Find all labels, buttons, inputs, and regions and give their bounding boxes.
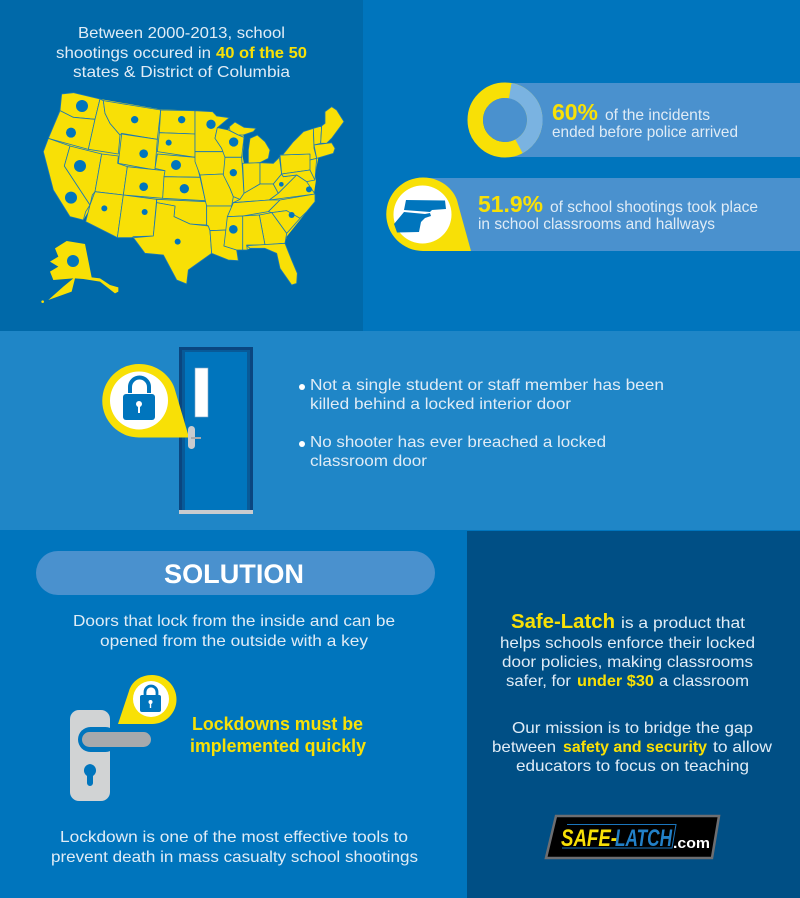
lockdown text — [51, 829, 418, 866]
product description: safer, for — [506, 673, 572, 690]
stat: 51.9 percent: in school classrooms and hallways — [478, 216, 715, 233]
product description: helps schools enforce their locked — [500, 635, 755, 652]
icon: door handle — [70, 710, 151, 801]
lockdown callout: implemented quickly — [190, 736, 366, 756]
icon: small padlock pin — [118, 675, 176, 724]
map heading — [56, 25, 307, 81]
solution heading — [36, 551, 435, 595]
icon: gun pin — [386, 178, 471, 251]
stat: 60 percent: 60% — [552, 99, 598, 125]
mission text — [492, 720, 772, 775]
solution text — [73, 613, 395, 650]
lockdown callout: Lockdowns must be — [192, 714, 363, 734]
mission text: to allow — [713, 739, 772, 756]
stat: 60 percent: ended before police arrived — [552, 124, 738, 141]
product description: is a product that — [621, 615, 746, 632]
logo: Safe-Latch: SAFE- — [561, 825, 617, 852]
product description: Safe-Latch — [511, 611, 615, 633]
door handle — [188, 426, 201, 449]
map heading: shootings occured in — [56, 45, 211, 62]
solution text: opened from the outside with a key — [100, 633, 368, 650]
product description: under $30 — [577, 673, 654, 690]
product description: door policies, making classrooms — [502, 654, 753, 671]
product description — [500, 611, 755, 690]
stat: 51.9 percent: of school shootings took place — [550, 199, 758, 216]
locked door bullets: killed behind a locked interior door — [310, 396, 572, 413]
panel: map — [0, 0, 363, 331]
lockdown text: prevent death in mass casualty school shootings — [51, 849, 418, 866]
logo: Safe-Latch: LATCH — [615, 825, 672, 852]
stat: 51.9 percent: 51.9% — [478, 191, 543, 217]
stat: 60 percent: of the incidents — [605, 107, 710, 124]
donut chart — [475, 90, 535, 150]
logo: Safe-Latch: .com — [673, 835, 710, 852]
mission text: between — [492, 739, 556, 756]
map heading: Between 2000-2013, school — [78, 25, 285, 42]
mission text: educators to focus on teaching — [516, 758, 749, 775]
lockdown text: Lockdown is one of the most effective tools to — [60, 829, 408, 846]
mission text: safety and security — [563, 739, 707, 756]
locked door bullets — [299, 377, 664, 470]
panel: solution — [36, 551, 435, 866]
solution text: Doors that lock from the inside and can be — [73, 613, 395, 630]
locked door bullets: classroom door — [310, 453, 428, 470]
panel: locked door — [0, 331, 800, 530]
door illustration — [179, 347, 253, 514]
panel: Safe-Latch — [467, 531, 800, 898]
logo: Safe-Latch — [546, 816, 719, 858]
US map — [41, 93, 344, 303]
stat: 51.9 percent — [386, 178, 800, 251]
map heading: 40 of the 50 — [216, 45, 307, 62]
map heading: states & District of Columbia — [73, 64, 290, 81]
locked door bullets: No shooter has ever breached a locked — [310, 434, 606, 451]
product description: a classroom — [659, 673, 749, 690]
lockdown callout — [190, 714, 366, 756]
solution heading: SOLUTION — [164, 559, 304, 589]
stat: 60 percent — [475, 83, 800, 157]
icon: padlock pin — [102, 364, 189, 438]
mission text: Our mission is to bridge the gap — [512, 720, 753, 737]
locked door bullets: Not a single student or staff member has been — [310, 377, 664, 394]
